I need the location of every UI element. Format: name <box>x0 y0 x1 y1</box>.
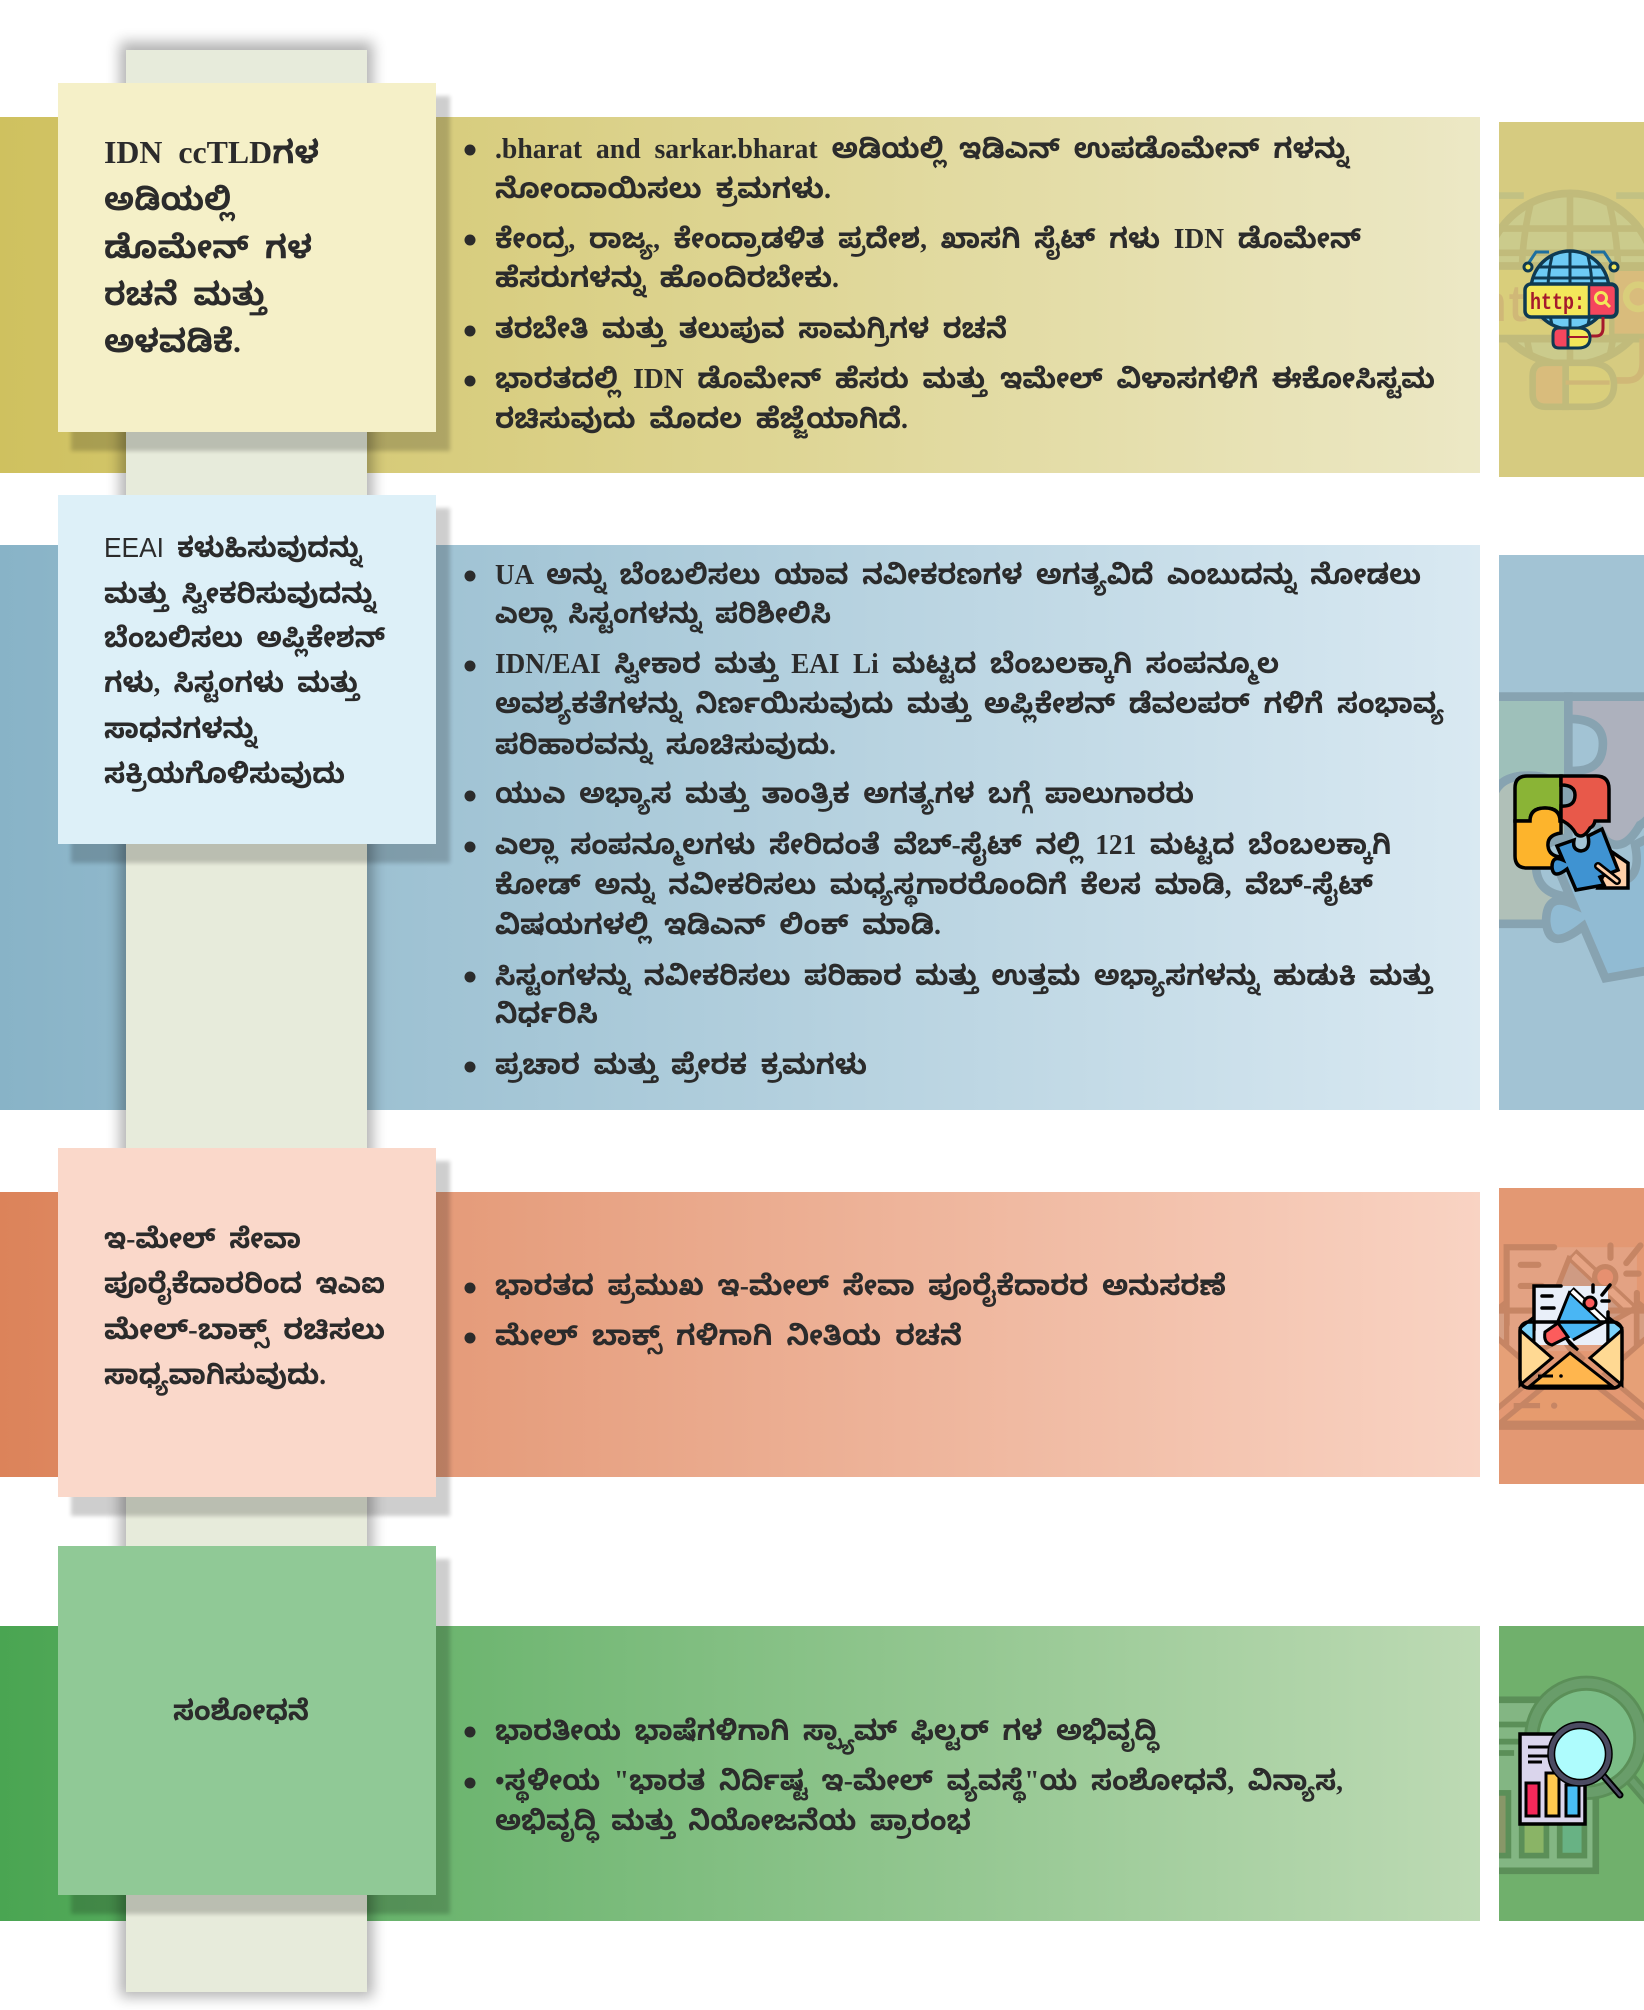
bullet item 2.4: ಕೋಡ್ ಅನ್ನು ನವೀಕರಿಸಲು ಮಧ್ಯಸ್ಥಗಾರರೊಂದಿಗೆ ಕೆಲಸ ಮಾಡಿ, ವೆಬ್-ಸೈಟ್ <box>495 870 1374 907</box>
bullet item 2.3: ಯುಎ ಅಭ್ಯಾಸ ಮತ್ತು ತಾಂತ್ರಿಕ ಅಗತ್ಯಗಳ ಬಗ್ಗೆ ಪಾಲುಗಾರರು <box>495 779 1194 815</box>
bullet item 2.4: ವಿಷಯಗಳಲ್ಲಿ ಇಡಿಎನ್ ಲಿಂಕ್ ಮಾಡಿ. <box>495 910 941 945</box>
heading: card 2: EEAI ಕಳುಹಿಸುವುದನ್ನು <box>104 532 363 568</box>
band: row 3 <box>0 1192 1480 1477</box>
bullet item 2.6: ಪ್ರಚಾರ ಮತ್ತು ಪ್ರೇರಕ ಕ್ರಮಗಳು <box>495 1050 867 1084</box>
icon tile: envelope with megaphone <box>1499 1188 1644 1484</box>
heading: card 1 <box>104 134 319 359</box>
text block: row 2 bullets <box>464 560 1444 1084</box>
vertical timeline rail <box>126 50 367 1992</box>
bullet item 1.4 <box>464 364 1435 439</box>
bullet item 2.2: ಅವಶ್ಯಕತೆಗಳನ್ನು ನಿರ್ಣಯಿಸುವುದು ಮತ್ತು ಅಪ್ಲಿಕೇಶನ್ ಡೆವಲಪರ್ ಗಳಿಗೆ ಸಂಭಾವ್ಯ <box>495 689 1444 725</box>
text block: row 1 bullets <box>464 134 1435 439</box>
bullet item 2.1: ಎಲ್ಲಾ ಸಿಸ್ಟಂಗಳನ್ನು ಪರಿಶೀಲಿಸಿ <box>495 599 831 634</box>
heading: card 3 <box>104 1224 385 1396</box>
bullet item 1.2: ಕೇಂದ್ರ, ರಾಜ್ಯ, ಕೇಂದ್ರಾಡಳಿತ ಪ್ರದೇಶ, ಖಾಸಗಿ ಸೈಟ್ ಗಳು IDN ಡೊಮೇನ್ <box>495 224 1362 260</box>
bullet item 2.2: IDN/EAI ಸ್ವೀಕಾರ ಮತ್ತು EAI Li ಮಟ್ಟದ ಬೆಂಬಲಕ್ಕಾಗಿ ಸಂಪನ್ಮೂಲ <box>495 649 1279 685</box>
bullet item 2.1 <box>464 560 1421 634</box>
heading: card 4: ಸಂಶೋಧನೆ <box>173 1696 309 1727</box>
heading: card 2: ಗಳು, ಸಿಸ್ಟಂಗಳು ಮತ್ತು <box>104 668 361 703</box>
bullet item 1.2: ಹೆಸರುಗಳನ್ನು ಹೊಂದಿರಬೇಕು. <box>495 263 839 298</box>
bullet item 4.2: ಅಭಿವೃದ್ಧಿ ಮತ್ತು ನಿಯೋಜನೆಯ ಪ್ರಾರಂಭ <box>495 1806 971 1843</box>
bullet item 2.2 <box>464 649 1444 765</box>
panel: card 3 background <box>58 1148 436 1497</box>
heading: card 2: ಮತ್ತು ಸ್ವೀಕರಿಸುವುದನ್ನು <box>104 579 377 614</box>
panel: card 4 background <box>58 1546 436 1895</box>
heading: card 2: ಸಕ್ರಿಯಗೊಳಿಸುವುದು <box>104 759 345 792</box>
icon tile: puzzle pieces and hand <box>1499 555 1644 1110</box>
panel: card 2 background <box>58 495 436 844</box>
bullet item 2.4 <box>464 830 1391 945</box>
bullet item 1.3: ತರಬೇತಿ ಮತ್ತು ತಲುಪುವ ಸಾಮಗ್ರಿಗಳ ರಚನೆ <box>495 314 1007 348</box>
text block: row 4 bullets <box>464 1716 1343 1843</box>
bullet item 3.1: ಭಾರತದ ಪ್ರಮುಖ ಇ-ಮೇಲ್ ಸೇವಾ ಪೂರೈಕೆದಾರರ ಅನುಸರಣೆ <box>495 1271 1226 1307</box>
bullet item 2.5: ನಿರ್ಧರಿಸಿ <box>495 999 598 1030</box>
bullet item 1.1 <box>464 134 1350 207</box>
text block: row 3 bullets <box>464 1271 1226 1355</box>
bullet item 1.1: .bharat and sarkar.bharat ಅಡಿಯಲ್ಲಿ ಇಡಿಎನ್ ಉಪಡೊಮೇನ್ ಗಳನ್ನು <box>495 134 1350 169</box>
heading: card 1: ಅಡಿಯಲ್ಲಿ <box>104 181 235 222</box>
bullet item 2.2: ಪರಿಹಾರವನ್ನು ಸೂಚಿಸುವುದು. <box>495 730 836 765</box>
heading: card 1: IDN ccTLDಗಳ <box>104 134 319 170</box>
icon tile: report with magnifier <box>1499 1626 1644 1921</box>
bullet item 1.4: ರಚಿಸುವುದು ಮೊದಲ ಹೆಜ್ಜೆಯಾಗಿದೆ. <box>495 404 908 439</box>
heading: card 3: ಇ-ಮೇಲ್ ಸೇವಾ <box>104 1224 301 1255</box>
bullet item 1.4: ಭಾರತದಲ್ಲಿ IDN ಡೊಮೇನ್ ಹೆಸರು ಮತ್ತು ಇಮೇಲ್ ವಿಳಾಸಗಳಿಗೆ ಈಕೋಸಿಸ್ಟಮ <box>495 364 1435 399</box>
heading: card 3: ಪೂರೈಕೆದಾರರಿಂದ ಇಎಐ <box>104 1269 385 1305</box>
bullet item 4.2 <box>464 1766 1343 1843</box>
bullet item 3.2: ಮೇಲ್ ಬಾಕ್ಸ್ ಗಳಿಗಾಗಿ ನೀತಿಯ ರಚನೆ <box>495 1321 962 1355</box>
bullet item 1.2 <box>464 224 1362 298</box>
heading: card 3: ಸಾಧ್ಯವಾಗಿಸುವುದು. <box>104 1360 326 1396</box>
bullet item 2.5: ಸಿಸ್ಟಂಗಳನ್ನು ನವೀಕರಿಸಲು ಪರಿಹಾರ ಮತ್ತು ಉತ್ತಮ ಅಭ್ಯಾಸಗಳನ್ನು ಹುಡುಕಿ ಮತ್ತು <box>495 961 1434 997</box>
panel: card 1 background <box>58 83 436 432</box>
bullet item 2.1: UA ಅನ್ನು ಬೆಂಬಲಿಸಲು ಯಾವ ನವೀಕರಣಗಳ ಅಗತ್ಯವಿದೆ ಎಂಬುದನ್ನು ನೋಡಲು <box>495 560 1421 596</box>
heading: card 3: ಮೇಲ್-ಬಾಕ್ಸ್ ರಚಿಸಲು <box>104 1315 385 1349</box>
band: row 1 <box>0 117 1480 473</box>
heading: card 1: ರಚನೆ ಮತ್ತು <box>104 276 268 316</box>
heading: card 1: ಡೊಮೇನ್ ಗಳ <box>104 229 312 265</box>
icon tile: globe http search <box>1499 122 1644 477</box>
bullet item 1.1: ನೋಂದಾಯಿಸಲು ಕ್ರಮಗಳು. <box>495 174 831 207</box>
heading: card 2: ಬೆಂಬಲಿಸಲು ಅಪ್ಲಿಕೇಶನ್ <box>104 623 386 658</box>
heading: card 1: ಅಳವಡಿಕೆ. <box>104 323 241 359</box>
heading: card 2 <box>104 532 386 792</box>
bullet item 2.4: ಎಲ್ಲಾ ಸಂಪನ್ಮೂಲಗಳು ಸೇರಿದಂತೆ ವೆಬ್-ಸೈಟ್ ನಲ್ಲಿ 121 ಮಟ್ಟದ ಬೆಂಬಲಕ್ಕಾಗಿ <box>495 830 1391 866</box>
heading: card 2: ಸಾಧನಗಳನ್ನು <box>104 714 258 749</box>
bullet item 2.5 <box>464 961 1434 1030</box>
bullet item 4.2: •ಸ್ಥಳೀಯ "ಭಾರತ ನಿರ್ದಿಷ್ಟ ಇ-ಮೇಲ್ ವ್ಯವಸ್ಥೆ"ಯ ಸಂಶೋಧನೆ, ವಿನ್ಯಾಸ, <box>495 1766 1343 1803</box>
bullet item 4.1: ಭಾರತೀಯ ಭಾಷೆಗಳಿಗಾಗಿ ಸ್ಪ್ಯಾಮ್ ಫಿಲ್ಟರ್ ಗಳ ಅಭಿವೃದ್ಧಿ <box>495 1716 1160 1755</box>
band: row 4 <box>0 1626 1480 1921</box>
band: row 2 <box>0 545 1480 1110</box>
